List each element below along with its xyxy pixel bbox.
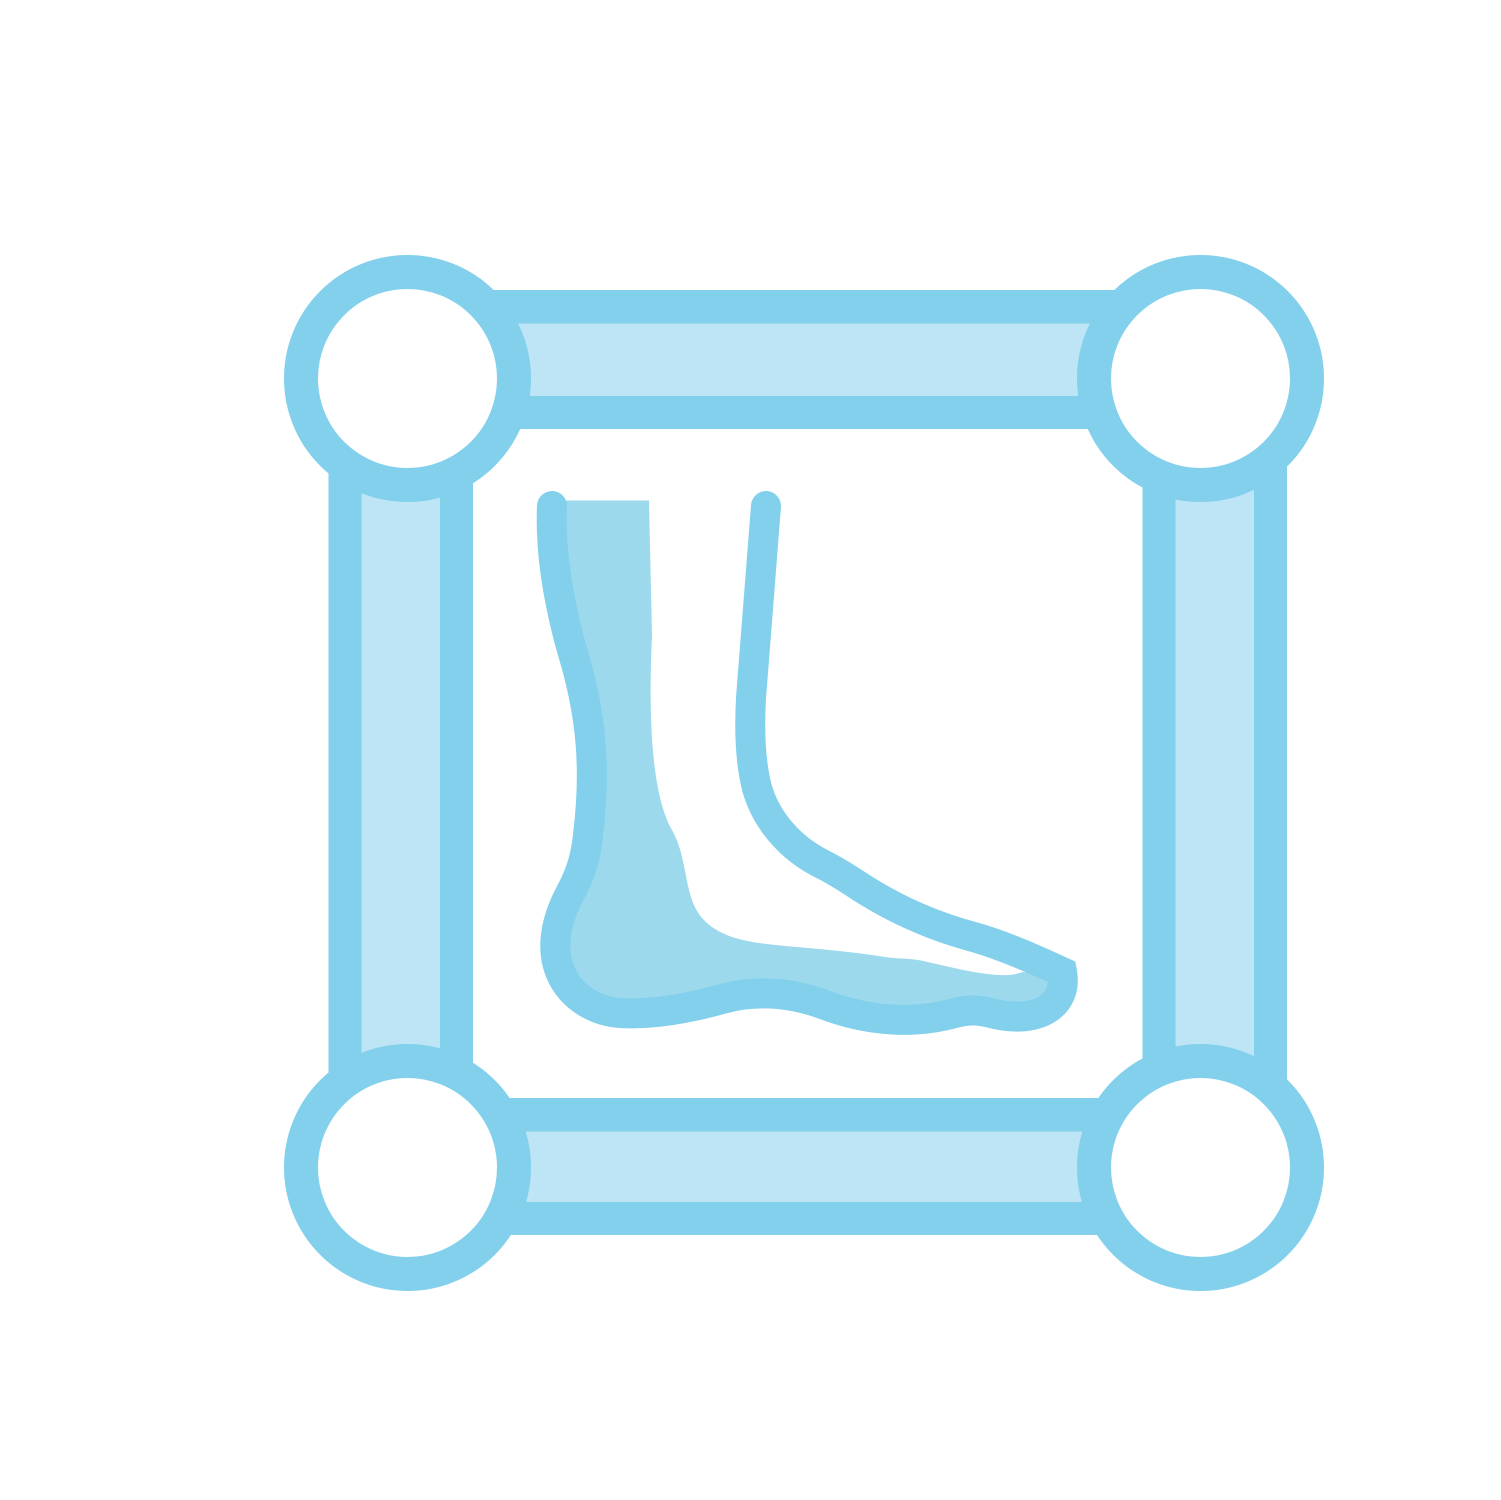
corner joint: top right [1094, 272, 1307, 485]
foot outline: shin, instep, toe, sole and heel [552, 506, 1063, 1020]
frame bar: top [460, 290, 1150, 429]
frame bar: left [328, 430, 473, 1110]
corner joint: bottom left [301, 1061, 514, 1274]
corner joint: bottom right [1094, 1061, 1307, 1274]
frame bar: right [1142, 430, 1287, 1110]
corner joint: top left [301, 272, 514, 485]
frame bar: bottom [460, 1098, 1150, 1235]
foot shaded area [551, 500, 1063, 1020]
